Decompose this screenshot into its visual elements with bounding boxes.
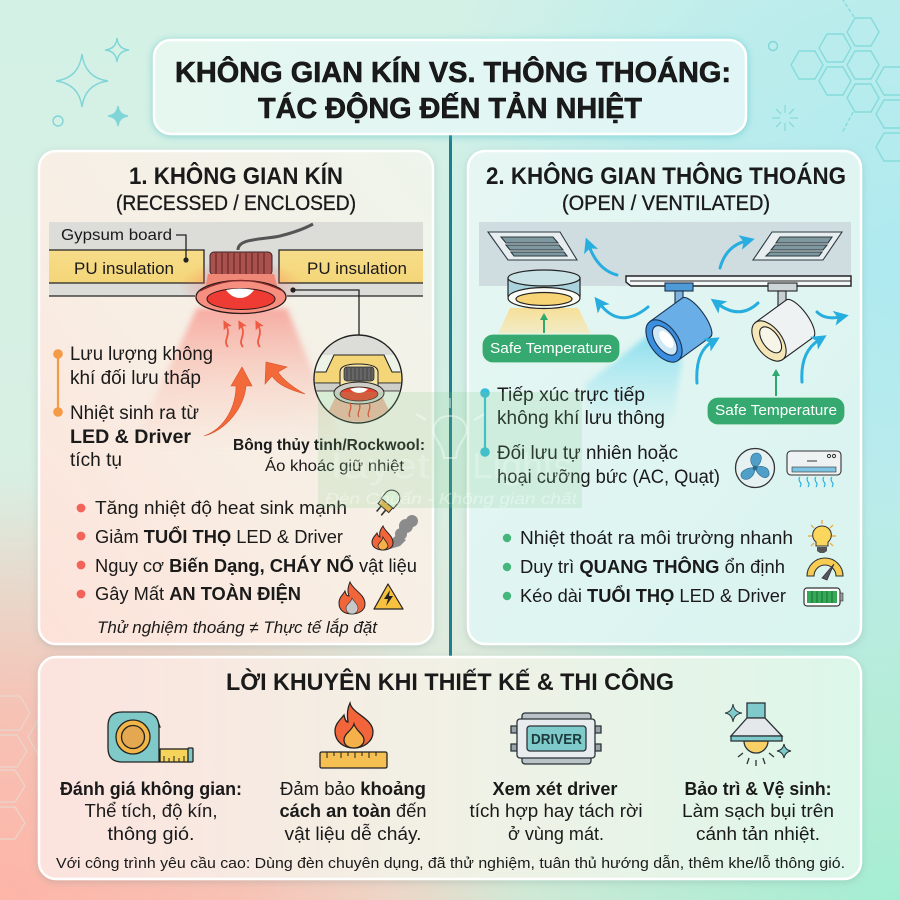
benefits list [503,528,793,606]
advice 3: driver [470,713,642,844]
icon: electrical warning [374,584,403,609]
badge: safe temperature downlight: Safe Temperature [490,341,612,357]
advice 4: maintenance: cánh tản nhiệt. [696,824,820,844]
advice 3: driver: tích hợp hay tách rời [470,801,642,821]
background decorations: hexagons bottom left [0,696,69,839]
advice 1: assess space: Thể tích, độ kín, [84,801,218,821]
consequences list [77,498,417,604]
icon: bulb [808,520,836,553]
note: test vs reality: Thử nghiệm thoáng ≠ Thực tế lắp đặt [97,618,378,637]
background decorations: sparkles [53,38,798,131]
title card: KHÔNG GIAN KÍN VS. THÔNG THOÁNG: [175,55,731,89]
heading: advice: LỜI KHUYÊN KHI THIẾT KẾ & THI CÔNG [226,668,674,696]
callout: low airflow and heat [53,344,213,471]
icon: air conditioner [787,451,841,487]
callout: low airflow and heat: Lưu lượng không [70,344,213,365]
title card: TÁC ĐỘNG ĐẾN TẢN NHIỆT [258,91,642,125]
caption: rockwool: Áo khoác giữ nhiệt [265,456,405,475]
heat wavy arrows [226,325,260,347]
heading: ventilated [486,162,846,215]
label: gypsum board [61,227,189,263]
icon: flame and smoke [372,515,418,550]
advice 2: safe distance: Đảm bảo khoảng [280,779,426,799]
badge: safe temperature downlight [482,313,620,363]
icon: battery [804,588,843,606]
orange arrow: rising heat left [204,367,252,436]
orange arrow: rising heat right [265,362,305,394]
benefits list: Duy trì QUANG THÔNG ổn định [520,556,785,577]
track rail [626,276,851,286]
advice 1: assess space [60,712,242,844]
panel: enclosed space [39,151,433,644]
blue airflow arrows [589,241,840,383]
heading: enclosed: (RECESSED / ENCLOSED) [116,192,356,215]
divider between panels [449,135,452,657]
callout: airflow contact: hoại cưỡng bức (AC, Quạt) [497,467,720,488]
consequences list: Nguy cơ Biến Dạng, CHÁY NỔ vật liệu [95,555,417,576]
leader to detail circle [293,290,359,336]
callout: low airflow and heat: LED & Driver [70,427,192,448]
icon: lamp with sparkles [725,703,791,766]
beam: downlight [497,308,592,336]
title card [154,40,746,134]
recessed light diagram [49,222,423,450]
icon: driver box [511,713,601,764]
advice 1: assess space: Đánh giá không gian: [60,779,242,799]
advice 4: maintenance [682,703,834,844]
advice 2: safe distance: cách an toàn đến [280,801,426,821]
callout: low airflow and heat: tích tụ [70,450,122,471]
advice 4: maintenance: Làm sạch bụi trên [682,801,834,821]
watermark: Iayet [330,445,430,486]
ventilated diagram [479,222,851,430]
callout: airflow contact: Tiếp xúc trực tiếp [497,385,645,406]
badge: safe temperature spot [707,369,845,425]
label: gypsum board: Gypsum board [61,227,172,244]
panel: design and construction advice [39,657,861,879]
icon: gauge [807,558,843,580]
icon: driver box: DRIVER [531,731,582,748]
callout: low airflow and heat: Nhiệt sinh ra từ [70,403,199,424]
watermark [318,392,582,508]
caption: rockwool: Bông thủy tinh/Rockwool: [233,437,425,454]
callout: airflow contact: không khí lưu thông [497,408,665,429]
heading: enclosed [116,162,356,215]
panel: ventilated space [468,151,861,644]
vents [488,232,842,260]
callout: low airflow and heat: khí đối lưu thấp [70,368,201,389]
icon: flame [339,582,365,614]
caption: rockwool [233,437,425,475]
footer note: Với công trình yêu cầu cao: Dùng đèn chuyên dụng, đã thử nghiệm, tuân thủ hướng dẫn, thêm khe/lỗ thông gió. [56,855,845,872]
watermark: Lights [472,445,572,486]
consequences list: Gây Mất AN TOÀN ĐIỆN [95,583,301,604]
icon: fan [736,448,774,488]
advice 1: assess space: thông gió. [108,824,194,844]
icon: tape measure [108,712,193,762]
label: PU insulation right: PU insulation [307,260,407,278]
icon: broken LED [373,487,403,519]
label: PU insulation left: PU insulation [74,260,174,278]
heading: enclosed: 1. KHÔNG GIAN KÍN [129,162,343,190]
callout: airflow contact [480,385,720,488]
advice 3: driver: ở vùng mát. [508,824,604,844]
advice 2: safe distance [280,703,426,844]
icon: flame on ruler [320,703,387,768]
background decorations: hexagons top right [791,0,900,161]
consequences list: Tăng nhiệt độ heat sink mạnh [95,498,347,518]
advice 3: driver: Xem xét driver [492,779,618,799]
detail circle [313,334,403,424]
benefits list: Kéo dài TUỔI THỌ LED & Driver [520,585,786,606]
beam: blue spot [585,335,682,430]
benefits list: Nhiệt thoát ra môi trường nhanh [520,528,793,548]
badge: safe temperature spot: Safe Temperature [715,403,837,419]
callout: airflow contact: Đối lưu tự nhiên hoặc [497,443,678,464]
consequences list: Giảm TUỔI THỌ LED & Driver [95,526,343,547]
watermark: Đèn Chuẩn - Không gian chất [325,491,578,508]
white spot light [745,283,820,367]
downlight [508,270,580,308]
heading: ventilated: (OPEN / VENTILATED) [562,192,770,215]
advice 4: maintenance: Bảo trì & Vệ sinh: [684,779,832,799]
blue spot light [639,283,717,369]
heading: ventilated: 2. KHÔNG GIAN THÔNG THOÁNG [486,162,846,190]
advice 2: safe distance: vật liệu dễ cháy. [284,823,422,844]
